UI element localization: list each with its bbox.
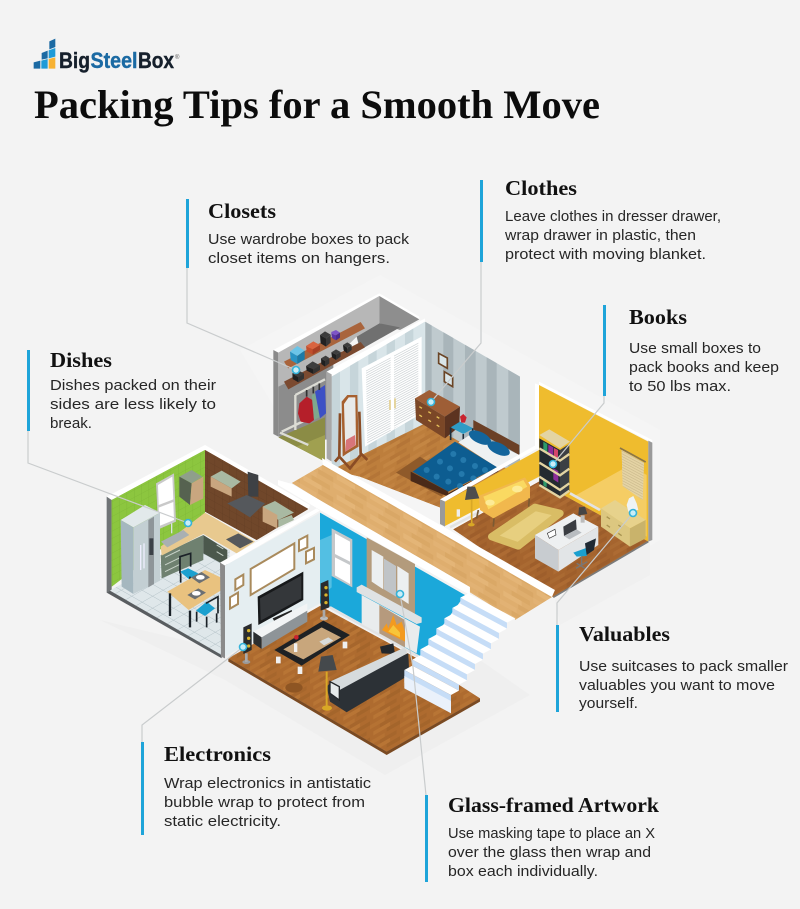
- callout: electronics: [141, 742, 371, 835]
- body text: Use small boxes to: [629, 341, 761, 357]
- speaker left: [242, 623, 252, 664]
- television: [258, 572, 303, 625]
- body text: bubble wrap to protect from: [164, 795, 365, 811]
- body text: box each individually.: [448, 864, 598, 880]
- logo wordmark: Big: [59, 48, 90, 73]
- dresser: [415, 390, 460, 438]
- bed: [411, 420, 519, 497]
- callout: glass-framed artwork: [425, 793, 659, 882]
- picture frames: [439, 353, 453, 387]
- logo: [34, 39, 180, 73]
- body text: [164, 776, 371, 830]
- accent bar: [141, 742, 144, 835]
- accent bar: [556, 625, 559, 712]
- bedside table and lamp: [451, 414, 473, 443]
- bedroom floor: [332, 420, 520, 510]
- partition wall: [440, 445, 539, 527]
- body text: pack books and keep: [629, 360, 779, 376]
- floor: [453, 482, 648, 597]
- body text: yourself.: [579, 696, 638, 712]
- logo icon: [34, 39, 55, 69]
- clothes rack: [280, 379, 326, 445]
- heading: Valuables: [579, 622, 670, 646]
- staircase: [404, 593, 515, 713]
- central walkway: [278, 458, 555, 620]
- body text: [504, 209, 721, 263]
- beige dresser: [601, 500, 646, 547]
- callout: books: [603, 305, 779, 396]
- callout: valuables: [556, 622, 788, 712]
- body text: wrap drawer in plastic, then: [504, 228, 696, 244]
- window: [156, 473, 176, 529]
- floor lamp: [465, 487, 479, 526]
- callout: clothes: [480, 176, 721, 263]
- heading: Clothes: [505, 176, 577, 200]
- accent bar: [186, 199, 189, 268]
- body text: to 50 lbs max.: [629, 379, 731, 395]
- body text: [50, 378, 216, 432]
- sofa: [327, 643, 409, 712]
- body text: [448, 826, 655, 880]
- back wall: [539, 385, 648, 542]
- body text: Use wardrobe boxes to pack: [208, 232, 410, 248]
- logo wordmark: ®: [175, 54, 180, 61]
- body text: break.: [50, 416, 92, 432]
- floor shadows: [100, 275, 660, 775]
- fireplace and chimney: [357, 537, 422, 653]
- body text: protect with moving blanket.: [505, 247, 706, 263]
- accent bar: [480, 180, 483, 262]
- media console: [253, 603, 307, 649]
- speaker right: [320, 580, 329, 620]
- blue wall: [320, 513, 465, 657]
- body text: closet items on hangers.: [208, 251, 390, 267]
- range hood: [227, 472, 265, 517]
- logo wordmark: [59, 48, 180, 73]
- rug: [396, 457, 457, 497]
- heading: Dishes: [50, 348, 112, 372]
- logo wordmark: Box: [138, 48, 175, 73]
- wall art frames: [230, 536, 314, 609]
- logo wordmark: Steel: [90, 48, 138, 73]
- boxes on shelves: [290, 330, 352, 382]
- heading: Glass-framed Artwork: [448, 793, 659, 817]
- shelves: [284, 322, 365, 389]
- green tile wall: [112, 450, 205, 587]
- dining table: [167, 570, 221, 627]
- brown tile wall: [205, 450, 308, 540]
- upper cabinets: [179, 470, 294, 528]
- body text: valuables you want to move: [579, 678, 775, 694]
- marker dots: [184, 366, 636, 650]
- desk: [535, 507, 598, 572]
- sofa: [477, 477, 530, 527]
- accent bar: [425, 795, 428, 882]
- window: [332, 528, 352, 587]
- coffee table: [274, 621, 350, 674]
- body text: Wrap electronics in antistatic: [164, 776, 371, 792]
- closet doors: [362, 337, 422, 447]
- heading: Electronics: [164, 742, 271, 766]
- counter and cabinets: [161, 513, 255, 578]
- body text: [629, 341, 779, 395]
- accent bar: [603, 305, 606, 396]
- callout: closets: [186, 199, 410, 268]
- body text: Dishes packed on their: [50, 378, 216, 394]
- dining chair back: [180, 553, 198, 583]
- striped partition wall: [326, 318, 425, 467]
- body text: [208, 232, 410, 267]
- yellow office lounge: [440, 382, 652, 597]
- fridge: [121, 505, 160, 594]
- leader lines: [28, 262, 633, 795]
- floor lamp: [318, 655, 337, 711]
- heading: Books: [629, 305, 687, 329]
- desk chair: [573, 538, 596, 569]
- title: Packing Tips for a Smooth Move: [34, 82, 600, 127]
- rug: [492, 507, 560, 546]
- floor: [228, 606, 480, 752]
- closet: [273, 293, 419, 462]
- striped back wall: [425, 322, 520, 468]
- partition wall: [220, 508, 320, 658]
- body text: [579, 659, 788, 712]
- body text: Leave clothes in dresser drawer,: [505, 209, 721, 225]
- accent bar: [27, 350, 30, 431]
- body text: static electricity.: [164, 814, 281, 830]
- mirror: [335, 395, 367, 468]
- body text: over the glass then wrap and: [448, 845, 651, 861]
- window blind: [620, 448, 646, 500]
- bookshelf: [539, 429, 570, 498]
- kitchen: [107, 445, 310, 658]
- bedroom and closet: [273, 293, 522, 510]
- floor tiles: [110, 537, 230, 657]
- body text: Use masking tape to place an X: [448, 826, 655, 842]
- vase: [627, 496, 638, 512]
- callout: dishes: [27, 348, 216, 432]
- body text: Use suitcases to pack smaller: [579, 659, 788, 675]
- living room: [220, 508, 515, 755]
- dining chair front: [196, 597, 218, 627]
- heading: Closets: [208, 199, 276, 223]
- body text: sides are less likely to: [50, 397, 216, 413]
